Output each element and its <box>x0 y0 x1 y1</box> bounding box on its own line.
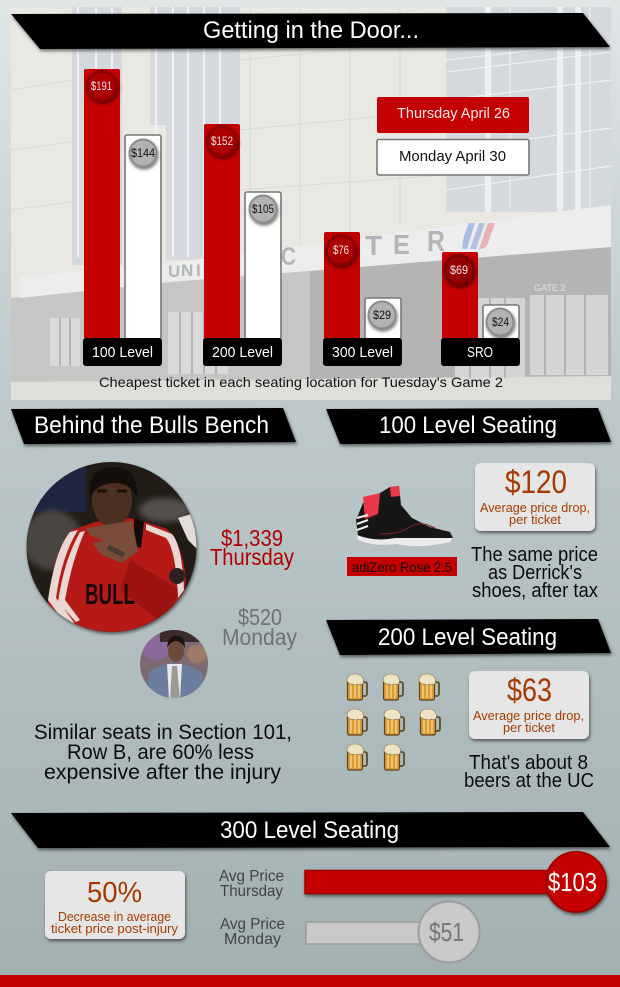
photo: player in suit, Monday <box>140 630 208 700</box>
text: shoe comparison: shoes, after tax <box>472 580 598 602</box>
callout: $120 price drop: Average price drop, <box>480 500 590 515</box>
label: Avg Price Monday: Monday <box>224 931 281 948</box>
text: shoe comparison <box>471 544 598 602</box>
callout: 50% decrease: 50% <box>87 877 142 909</box>
callout: $63 price drop <box>469 671 589 739</box>
building lettering: N <box>181 261 193 280</box>
bar: Monday $51: $51 <box>429 917 464 947</box>
panel: arena photo background: GATE 2 <box>534 283 565 293</box>
label: Monday price: $520 <box>238 604 282 630</box>
label: Avg Price Thursday: Avg Price <box>219 868 284 885</box>
SRO bars: $69 <box>450 265 468 277</box>
label: Avg Price Monday <box>220 916 285 948</box>
text: seats comparison <box>34 721 292 784</box>
callout: 50% decrease <box>45 871 185 939</box>
callout: $63 price drop: Average price drop, <box>473 708 584 723</box>
300 Level bars: $76 <box>333 245 349 257</box>
label: Avg Price Thursday <box>219 868 284 900</box>
SRO bars: $24 <box>492 317 510 329</box>
footer bar <box>0 975 620 987</box>
text: seats comparison: Row B, are 60% less <box>67 741 254 764</box>
label: Thursday price: $1,339 <box>221 525 283 551</box>
text: beer comparison: That's about 8 <box>469 752 588 774</box>
legend <box>377 97 529 175</box>
callout: $63 price drop: $63 <box>507 672 552 708</box>
label: Avg Price Thursday: Thursday <box>220 883 283 900</box>
SRO bars <box>442 252 519 339</box>
banner: 200 Level Seating: 200 Level Seating <box>378 624 557 651</box>
callout: 50% decrease: ticket price post-injury <box>51 921 178 936</box>
text: shoe comparison: as Derrick's <box>488 562 582 584</box>
200 Level bars <box>204 124 281 339</box>
bar chart: cheapest ticket <box>83 69 520 366</box>
banner: 100 Level Seating <box>326 408 611 444</box>
building lettering <box>169 231 444 277</box>
100 Level bars <box>84 69 161 339</box>
text: beer comparison: beers at the UC <box>464 770 594 792</box>
axis labels: SRO <box>467 344 493 361</box>
banner: 100 Level Seating: 100 Level Seating <box>379 412 557 439</box>
100 Level bars: $191 <box>91 81 112 93</box>
building lettering: I <box>196 261 201 280</box>
banner: 300 Level Seating <box>11 812 610 848</box>
lower facade <box>11 271 310 382</box>
banner: 300 Level Seating: 300 Level Seating <box>220 817 399 844</box>
banner: Behind the Bulls Bench: Behind the Bulls Bench <box>34 412 269 439</box>
banner: Behind the Bulls Bench <box>11 408 296 444</box>
legend: Thursday April 26 <box>397 105 510 122</box>
callout: $120 price drop: $120 <box>505 464 567 500</box>
300 Level bars <box>324 232 401 339</box>
building lettering: T <box>365 230 382 261</box>
icon: eight beer mugs <box>347 674 440 770</box>
building lettering: E <box>393 229 410 260</box>
banner: Getting in the Door <box>11 13 610 49</box>
bar: Thursday $103: $103 <box>548 867 597 897</box>
label: Thursday price <box>210 525 294 570</box>
text: shoe comparison: The same price <box>471 544 598 566</box>
text: seats comparison: Similar seats in Section 101, <box>34 721 292 744</box>
200 Level bars: $152 <box>211 136 233 148</box>
banner: 200 Level Seating <box>326 619 611 655</box>
callout: $63 price drop: per ticket <box>503 720 555 735</box>
label: Thursday price: Thursday <box>210 544 294 570</box>
text: seats comparison: expensive after the injury <box>44 761 281 784</box>
panel: arena photo background <box>11 7 611 400</box>
axis labels <box>83 338 520 366</box>
200 Level bars: $105 <box>252 204 274 216</box>
legend: Monday April 30 <box>399 148 506 165</box>
axis labels: 200 Level <box>212 344 273 361</box>
label: Monday price <box>222 604 297 650</box>
callout: $120 price drop <box>475 463 595 531</box>
label: Monday price: Monday <box>222 624 297 650</box>
label: Avg Price Monday: Avg Price <box>220 916 285 933</box>
axis labels: 300 Level <box>332 344 393 361</box>
chart caption: Cheapest ticket in each seating location for Tuesday's Game 2 <box>99 374 503 390</box>
bar: Monday $51 <box>306 902 480 962</box>
building lettering: C <box>281 243 296 271</box>
banner: Getting in the Door: Getting in the Door... <box>203 17 419 44</box>
300 Level bars: $29 <box>373 310 391 322</box>
callout: 50% decrease: Decrease in average <box>58 909 171 924</box>
bar: Thursday $103 <box>305 852 606 912</box>
photo: player on bench, Thursday <box>22 462 198 640</box>
label: shoe name: adiZero Rose 2.5 <box>352 560 452 575</box>
100 Level bars: $144 <box>131 148 156 160</box>
axis labels: 100 Level <box>92 344 153 361</box>
building lettering: R <box>427 226 445 258</box>
icon: basketball shoe <box>356 486 453 546</box>
callout: $120 price drop: per ticket <box>509 512 561 527</box>
photo: player on bench, Thursday: BULL <box>85 579 135 611</box>
text: beer comparison <box>464 752 594 792</box>
building lettering: U <box>168 262 180 281</box>
